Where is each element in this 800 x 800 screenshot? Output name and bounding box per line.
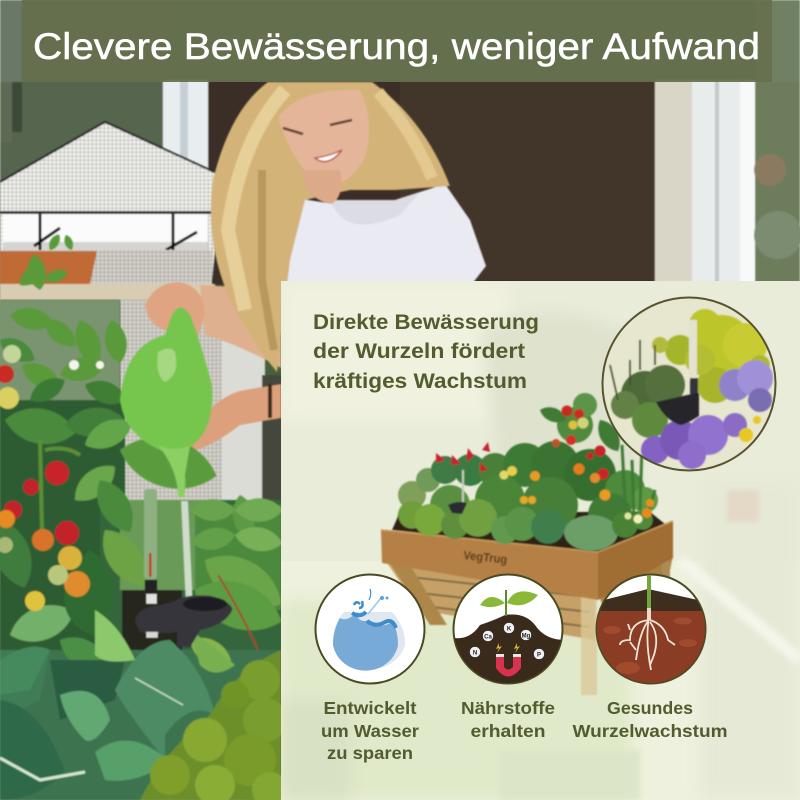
right arm — [188, 384, 281, 452]
nutrient badges — [470, 622, 544, 660]
sensor tube and dish — [689, 320, 697, 380]
label: nutrients: Nährstoffe — [461, 698, 555, 718]
icon: nutrients and magnet: N — [473, 650, 477, 656]
watering sensor — [135, 489, 232, 647]
planter box — [381, 512, 673, 695]
title: Clevere Bewässerung, weniger Aufwand — [33, 26, 760, 67]
face — [278, 90, 369, 187]
heading: der Wurzeln fördert — [313, 340, 525, 363]
purple flowers — [641, 360, 773, 469]
brand mark: VegTrug — [463, 548, 508, 567]
content panel — [281, 281, 800, 800]
left plants — [0, 232, 292, 800]
planter legs and slats — [385, 555, 673, 695]
woman — [145, 82, 486, 452]
cabbage leaves — [0, 610, 235, 800]
watering can — [120, 308, 212, 497]
icon: root growth — [595, 574, 707, 687]
peppers — [436, 442, 490, 472]
icon: nutrients and magnet: Mg — [522, 634, 531, 640]
label: root growth: Wurzelwachstum — [572, 721, 728, 741]
icon: nutrients and magnet — [454, 574, 565, 690]
pea vine — [0, 232, 130, 410]
shirt — [277, 184, 486, 284]
icon: nutrients and magnet: K — [507, 626, 512, 632]
tomatoes in bed — [500, 406, 654, 524]
title bar — [22, 0, 772, 82]
label: water saving — [321, 698, 419, 763]
label: root growth — [572, 698, 728, 741]
yellow shrub — [652, 309, 770, 403]
label: water saving: um Wasser — [321, 721, 419, 741]
greenhouse cover — [0, 122, 282, 505]
label: nutrients — [461, 698, 555, 741]
icon: nutrients and magnet: Ca — [484, 634, 492, 640]
terracotta planter — [0, 251, 97, 284]
label: nutrients: erhalten — [470, 721, 546, 741]
planter plants — [398, 393, 658, 551]
water stream — [181, 501, 193, 608]
small sensor in planter — [448, 502, 467, 514]
lavender herb — [610, 340, 685, 438]
icon: water bowl — [316, 574, 424, 684]
parsley — [140, 650, 288, 800]
label: root growth: Gesundes — [607, 698, 693, 718]
heading — [313, 311, 539, 393]
heading: Direkte Bewässerung — [313, 311, 539, 334]
label: water saving: zu sparen — [327, 743, 413, 763]
left arm — [200, 285, 281, 368]
herbs along the rim — [398, 501, 426, 529]
heading: kräftiges Wachstum — [313, 370, 527, 393]
large tomato leaves — [0, 407, 218, 660]
label: water saving: Entwickelt — [324, 698, 417, 718]
inset circle: sensor among flowers — [602, 297, 776, 471]
tomatoes — [45, 461, 69, 485]
icon: nutrients and magnet: P — [537, 652, 541, 658]
basil and chard — [190, 494, 281, 662]
hair — [211, 82, 450, 372]
